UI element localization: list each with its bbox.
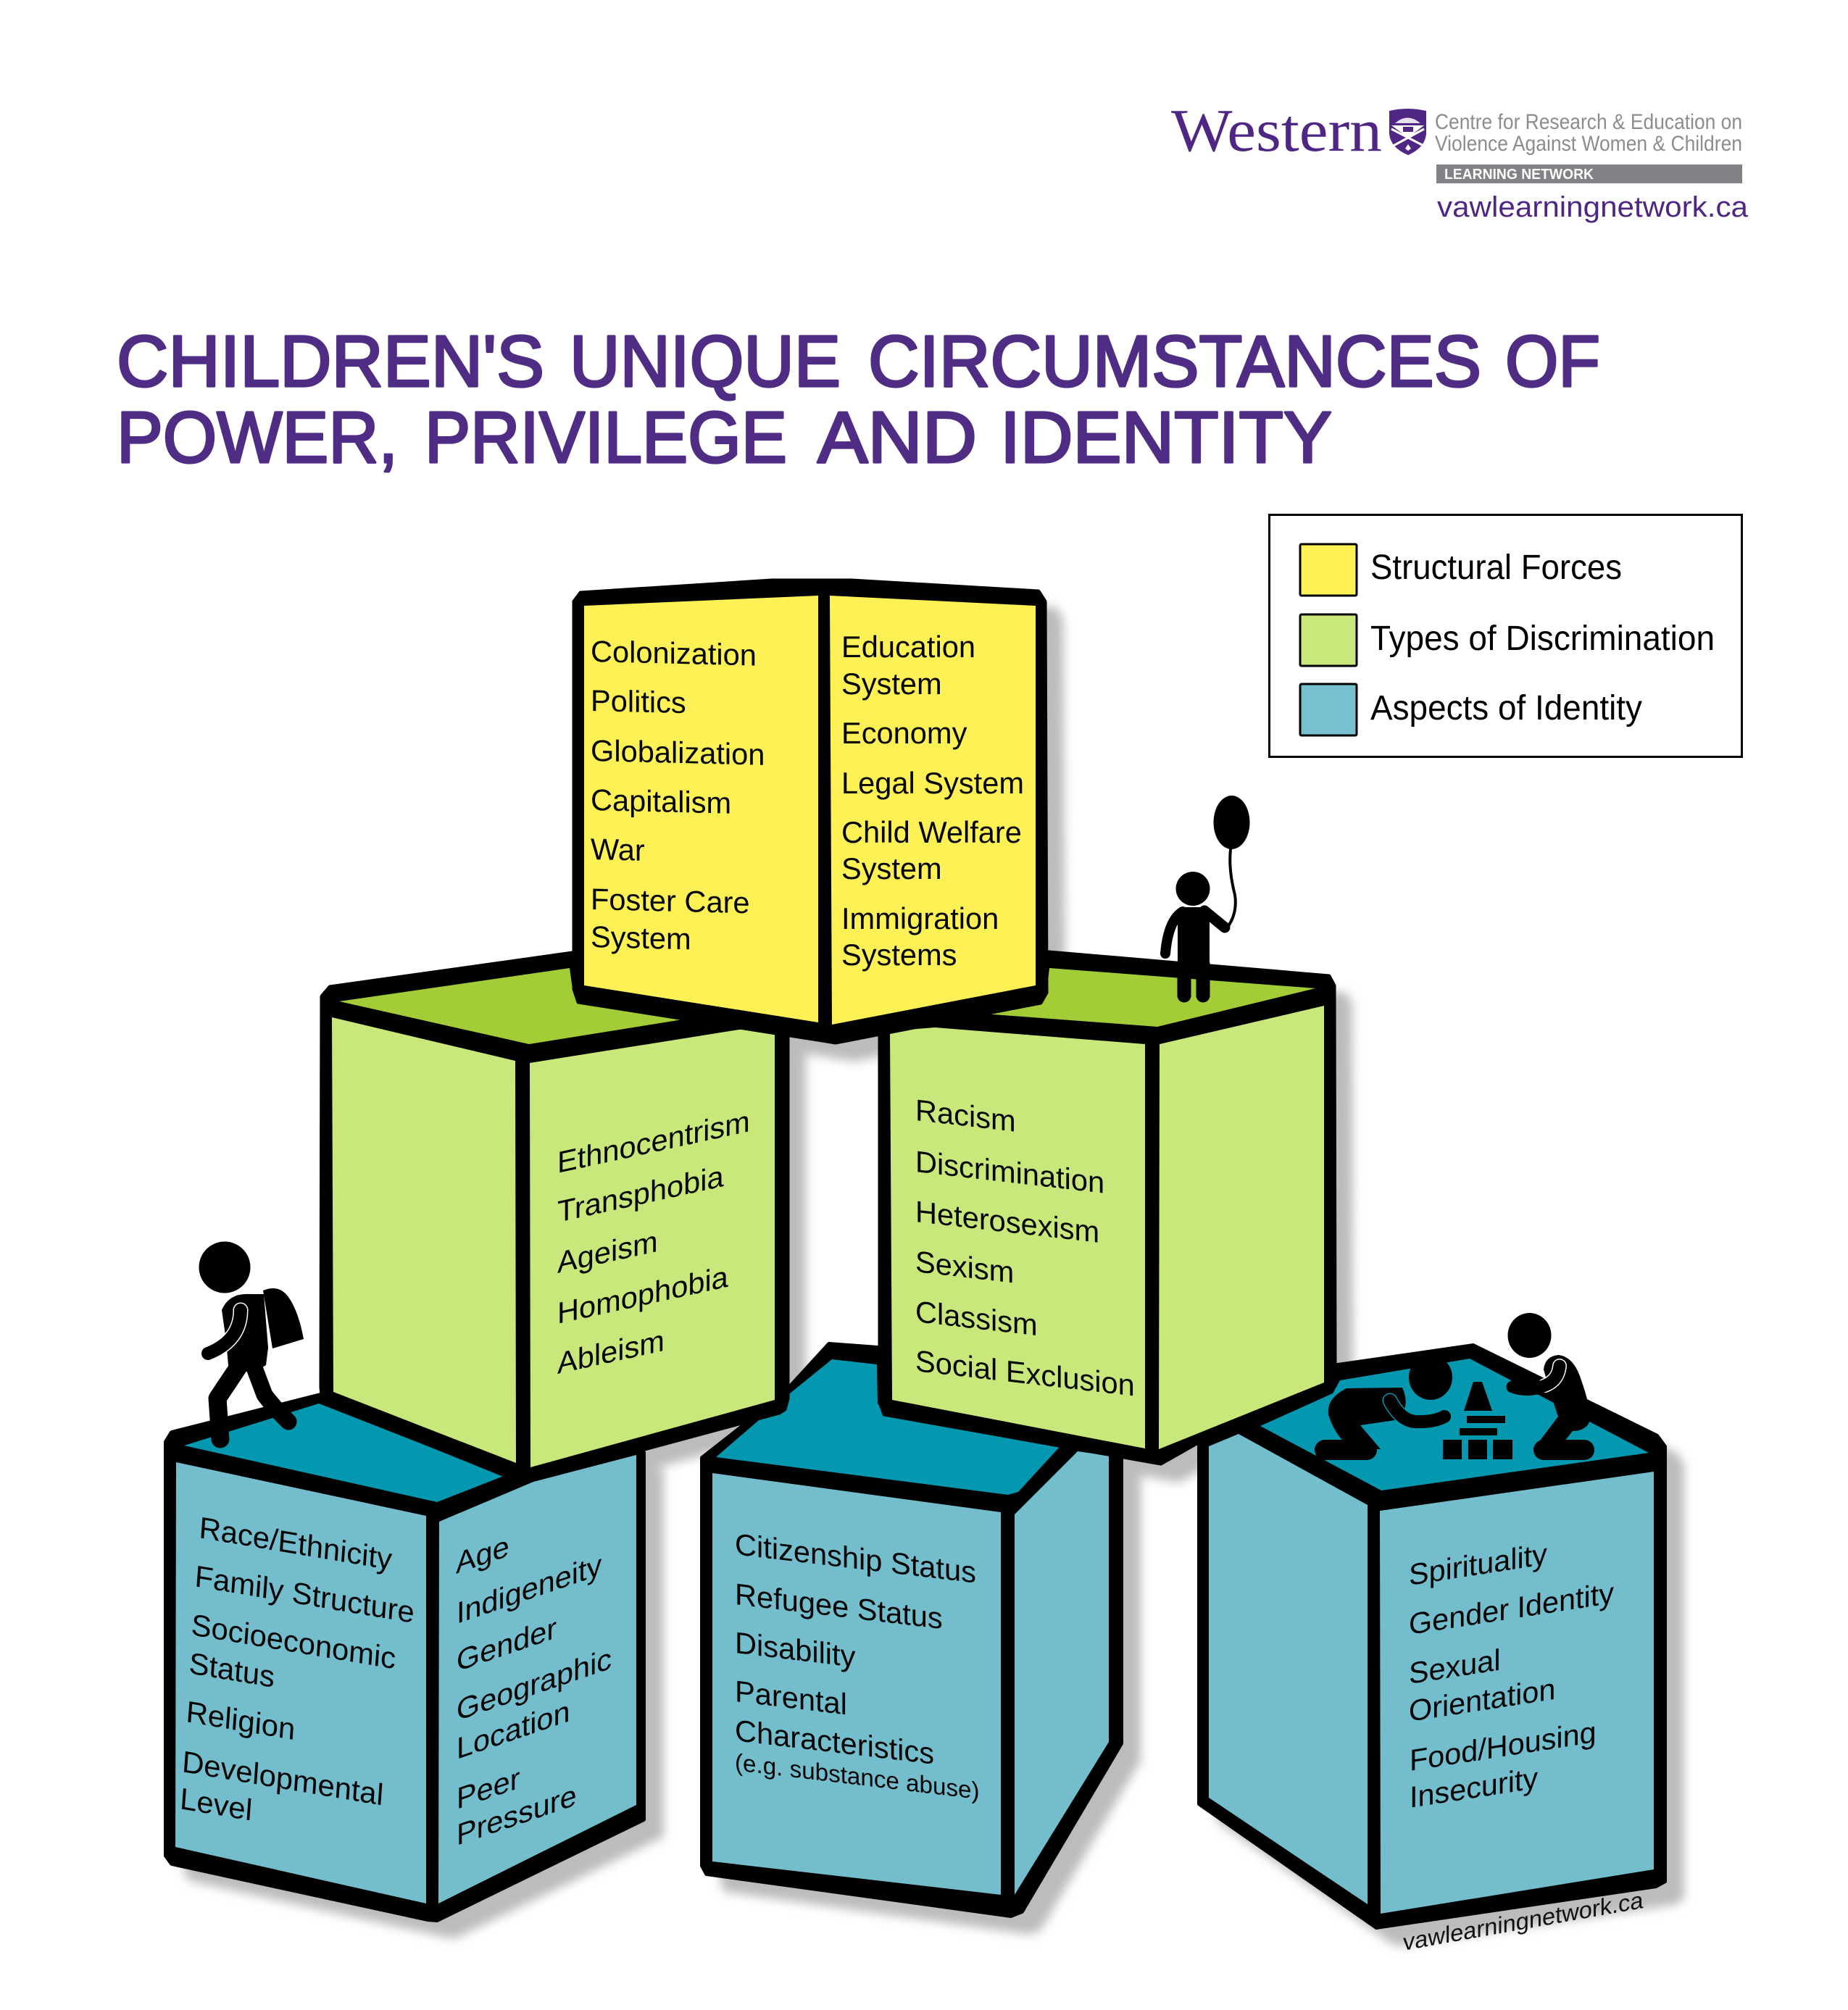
- text: right face list: Ethnocentrism: [557, 1104, 750, 1180]
- text: left face list: Status: [188, 1646, 276, 1694]
- learning network bar: [1436, 164, 1742, 183]
- text: left face list: Developmental: [181, 1744, 385, 1812]
- logo: Western Centre for Research and Education: [1171, 97, 1749, 223]
- text: front face list: (e.g. substance abuse): [735, 1749, 980, 1805]
- panel: structural forces block: [574, 580, 1046, 1043]
- icon: left child: [1315, 1355, 1452, 1460]
- text: right face list: Immigration: [841, 901, 999, 935]
- text: front face list: [1409, 1537, 1614, 1814]
- text: left face list: Sexism: [915, 1244, 1014, 1290]
- text: front face list: [735, 1527, 980, 1805]
- legend item: types of discrimination: Types of Discrimination: [1370, 620, 1715, 658]
- text: right face list: Economy: [841, 716, 967, 750]
- panel: aspects of identity block, middle: [702, 1344, 1121, 1916]
- text: left face list: Capitalism: [591, 783, 731, 820]
- text: front face list: Disability: [735, 1625, 856, 1674]
- text: right face list: Homophobia: [557, 1259, 728, 1330]
- text: front face list: Parental: [735, 1674, 847, 1721]
- text: left face list: Social Exclusion: [915, 1343, 1135, 1402]
- title: OF: [1505, 321, 1600, 402]
- text: right face list: Legal System: [841, 766, 1024, 800]
- legend item: structural forces: [1300, 544, 1622, 596]
- icon: crest shield: [1389, 109, 1426, 155]
- panel: aspects of identity block, right: [1199, 1345, 1665, 1928]
- icon: block tower: [1443, 1382, 1512, 1459]
- text: left face list: Globalization: [591, 733, 765, 772]
- title: CHILDREN'S: [117, 321, 544, 402]
- text: right face list: Ageism: [557, 1224, 658, 1280]
- legend item: aspects of identity: Aspects of Identity: [1370, 689, 1642, 727]
- text: right face list: Indigeneity: [457, 1548, 602, 1631]
- website: vawlearningnetwork.ca: [1437, 191, 1749, 223]
- learning network bar: LEARNING NETWORK: [1444, 167, 1594, 183]
- text: front face list: Spirituality: [1409, 1537, 1547, 1592]
- title: CIRCUMSTANCES: [868, 321, 1481, 402]
- text: front face list: Refugee Status: [735, 1577, 943, 1635]
- text: right face list: System: [841, 667, 942, 701]
- text: left face list: Racism: [915, 1093, 1016, 1138]
- wordmark: Western: Western: [1171, 97, 1382, 164]
- text: left face list: Discrimination: [915, 1144, 1104, 1200]
- text: front face list: Food/Housing: [1410, 1714, 1597, 1777]
- text: left face list: Family Structure: [193, 1559, 415, 1630]
- text: left face list: Politics: [591, 683, 686, 720]
- icon: right child: [1507, 1313, 1594, 1460]
- text: right face list: Systems: [841, 938, 957, 972]
- text: left face list: [591, 634, 765, 956]
- text: left face list: Foster Care: [591, 882, 750, 919]
- text: front face list: Characteristics: [735, 1713, 934, 1771]
- text: right face list: Child Welfare: [841, 815, 1022, 849]
- text: front face list: Gender Identity: [1409, 1575, 1614, 1641]
- logo: Western Centre for Research and Education: Violence Against Women & Children: [1435, 132, 1742, 156]
- text: right face list: Transphobia: [557, 1159, 724, 1229]
- centre name: Centre for Research & Education on: [1435, 110, 1742, 134]
- text: left face list: Classism: [915, 1294, 1038, 1342]
- text: right face list: Gender: [457, 1611, 557, 1679]
- text: right face list: Pressure: [457, 1778, 577, 1853]
- panel: types of discrimination block, right: [880, 952, 1335, 1464]
- text: front face list: Sexual: [1409, 1643, 1501, 1690]
- legend item: structural forces: Structural Forces: [1370, 549, 1622, 587]
- text: front face list: Citizenship Status: [735, 1527, 976, 1590]
- icon: child with backpack walking: [199, 1242, 304, 1439]
- text: right face list: Location: [457, 1694, 570, 1767]
- drop shadows: [184, 596, 1684, 1946]
- title: POWER,: [117, 397, 398, 478]
- title: UNIQUE: [570, 321, 841, 402]
- legend: [1270, 514, 1742, 756]
- text: front face list: Insecurity: [1410, 1761, 1538, 1814]
- text: left face list: [179, 1510, 415, 1827]
- text: right face list: Geographic: [457, 1641, 612, 1728]
- text: right face list: Age: [456, 1529, 509, 1581]
- title: PRIVILEGE: [425, 397, 787, 478]
- text: right face list: [557, 1104, 750, 1380]
- text: front face list: Orientation: [1409, 1672, 1555, 1728]
- text: right face list: [456, 1529, 612, 1853]
- legend item: types of discrimination: [1300, 614, 1715, 666]
- text: left face list: Level: [179, 1781, 254, 1827]
- text: left face list: System: [591, 919, 691, 956]
- text: left face list: Religion: [185, 1694, 296, 1746]
- text: right face list: System: [841, 851, 942, 885]
- text: left face list: Socioeconomic: [190, 1607, 397, 1675]
- footer website: vawlearningnetwork.ca: [1403, 1886, 1644, 1956]
- panel: types of discrimination block, left: [321, 953, 788, 1480]
- panel: aspects of identity block, left: [166, 1390, 644, 1920]
- text: right face list: Education: [841, 630, 975, 664]
- text: left face list: War: [591, 832, 645, 867]
- text: left face list: [915, 1093, 1135, 1402]
- legend item: aspects of identity: [1300, 684, 1642, 735]
- text: left face list: Race/Ethnicity: [198, 1510, 394, 1577]
- title: [117, 321, 1600, 478]
- text: right face list: Ableism: [557, 1323, 665, 1380]
- text: right face list: [841, 630, 1024, 972]
- icon: child with balloon: [1165, 796, 1249, 996]
- title: IDENTITY: [1000, 397, 1332, 478]
- icon: two children building with blocks: [1315, 1313, 1594, 1460]
- title: AND: [817, 397, 977, 478]
- text: right face list: Peer: [457, 1761, 520, 1817]
- text: left face list: Colonization: [591, 634, 757, 672]
- text: left face list: Heterosexism: [915, 1194, 1099, 1249]
